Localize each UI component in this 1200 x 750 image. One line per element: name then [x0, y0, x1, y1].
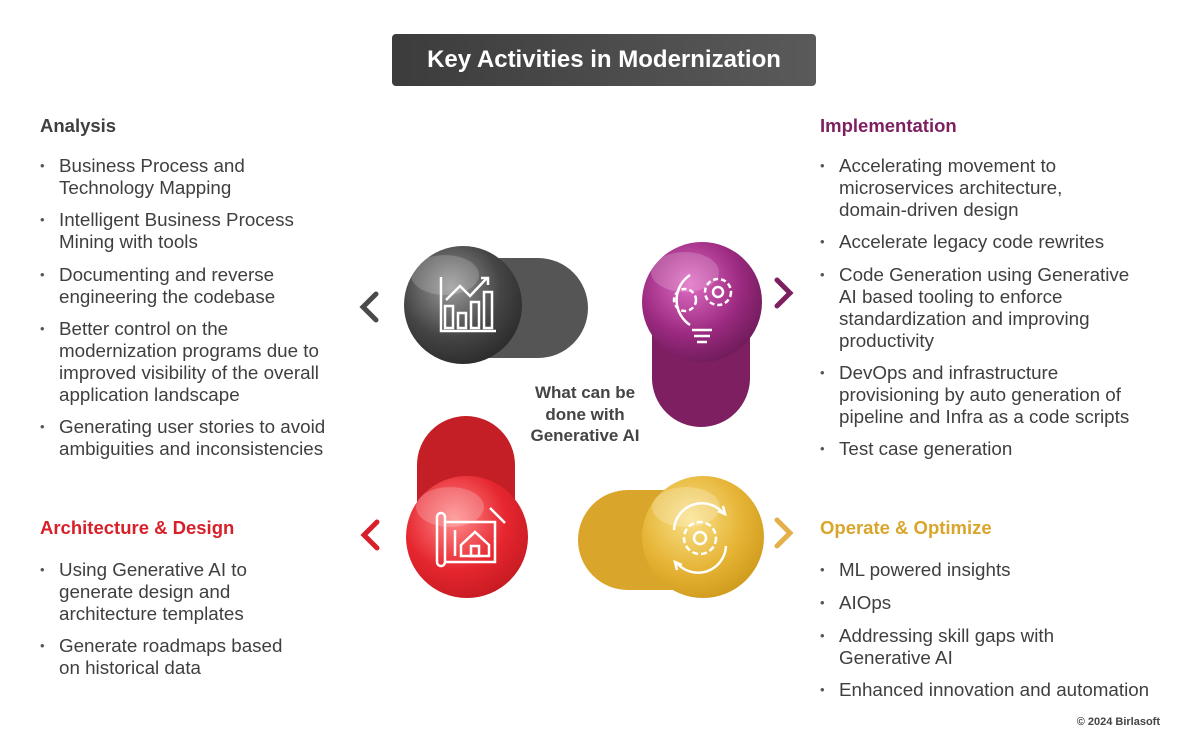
- panel: operate & optimize: [820, 517, 1149, 700]
- pill: analysis grey: [463, 258, 588, 358]
- panel: implementation: Accelerating movement to: [839, 155, 1056, 176]
- panel: implementation: pipeline and Infra as a code scripts: [839, 406, 1129, 427]
- panel: operate & optimize: Enhanced innovation and automation: [839, 679, 1149, 700]
- panel: operate & optimize: ML powered insights: [839, 559, 1011, 580]
- center text: [530, 383, 639, 445]
- copyright: © 2024 Birlasoft: [1077, 716, 1160, 728]
- panel: analysis: Technology Mapping: [59, 177, 231, 198]
- heading: architecture: Architecture & Design: [40, 517, 234, 538]
- center text: done with: [545, 404, 625, 424]
- heading: operate: Operate & Optimize: [820, 517, 992, 538]
- panel: analysis: application landscape: [59, 384, 240, 405]
- icon: analysis bubble chart: [404, 246, 522, 364]
- list: architecture: [40, 559, 282, 678]
- center text: Generative AI: [530, 426, 639, 445]
- panel: implementation: provisioning by auto generation of: [839, 384, 1121, 405]
- panel: implementation: Code Generation using Generative: [839, 264, 1129, 285]
- panel: analysis: [40, 115, 325, 459]
- arrow: architecture: [364, 522, 377, 548]
- panel: operate & optimize: Generative AI: [839, 647, 953, 668]
- title: Key Activities in Modernization: [427, 46, 781, 73]
- panel: analysis: improved visibility of the overall: [59, 362, 319, 383]
- pill: implementation purple: [652, 302, 750, 427]
- panel: implementation: [820, 115, 1129, 459]
- panel: architecture & design: on historical data: [59, 657, 201, 678]
- panel: implementation: Accelerate legacy code rewrites: [839, 231, 1104, 252]
- panel: operate & optimize: Addressing skill gaps with: [839, 625, 1054, 646]
- panel: analysis: Generating user stories to avoid: [59, 416, 325, 437]
- panel: architecture & design: [40, 517, 282, 678]
- panel: architecture & design: architecture templates: [59, 603, 244, 624]
- arrow: analysis: [363, 294, 376, 320]
- icon: operate bubble gear cycle: [642, 476, 764, 598]
- list: implementation: [820, 155, 1129, 459]
- arrow: implementation: [777, 280, 790, 306]
- arrow: operate: [777, 520, 790, 546]
- heading: analysis: Analysis: [40, 115, 116, 136]
- panel: implementation: Test case generation: [839, 438, 1012, 459]
- list: analysis: [40, 155, 325, 459]
- icon: implementation bubble lightbulb gears: [642, 242, 762, 362]
- heading: implementation: Implementation: [820, 115, 957, 136]
- panel: analysis: engineering the codebase: [59, 286, 275, 307]
- center text: What can be: [535, 383, 635, 402]
- panel: analysis: Better control on the: [59, 318, 228, 339]
- icon: architecture bubble blueprint: [406, 476, 528, 598]
- panel: implementation: DevOps and infrastructure: [839, 362, 1058, 383]
- panel: analysis: Intelligent Business Process: [59, 209, 294, 230]
- panel: analysis: ambiguities and inconsistencies: [59, 438, 323, 459]
- panel: analysis: modernization programs due to: [59, 340, 319, 361]
- panel: operate & optimize: AIOps: [839, 592, 891, 613]
- panel: implementation: standardization and improving: [839, 308, 1090, 329]
- panel: analysis: Business Process and: [59, 155, 245, 176]
- panel: implementation: AI based tooling to enforce: [839, 286, 1062, 307]
- panel: architecture & design: Generate roadmaps based: [59, 635, 282, 656]
- panel: analysis: Documenting and reverse: [59, 264, 274, 285]
- panel: implementation: microservices architecture,: [839, 177, 1062, 198]
- panel: implementation: productivity: [839, 330, 934, 351]
- panel: architecture & design: Using Generative AI to: [59, 559, 247, 580]
- pill: operate yellow: [578, 490, 703, 590]
- title: [392, 34, 816, 86]
- panel: architecture & design: generate design and: [59, 581, 230, 602]
- list: operate: [820, 559, 1149, 700]
- panel: implementation: domain-driven design: [839, 199, 1019, 220]
- panel: analysis: Mining with tools: [59, 231, 198, 252]
- pill: architecture red: [417, 416, 515, 537]
